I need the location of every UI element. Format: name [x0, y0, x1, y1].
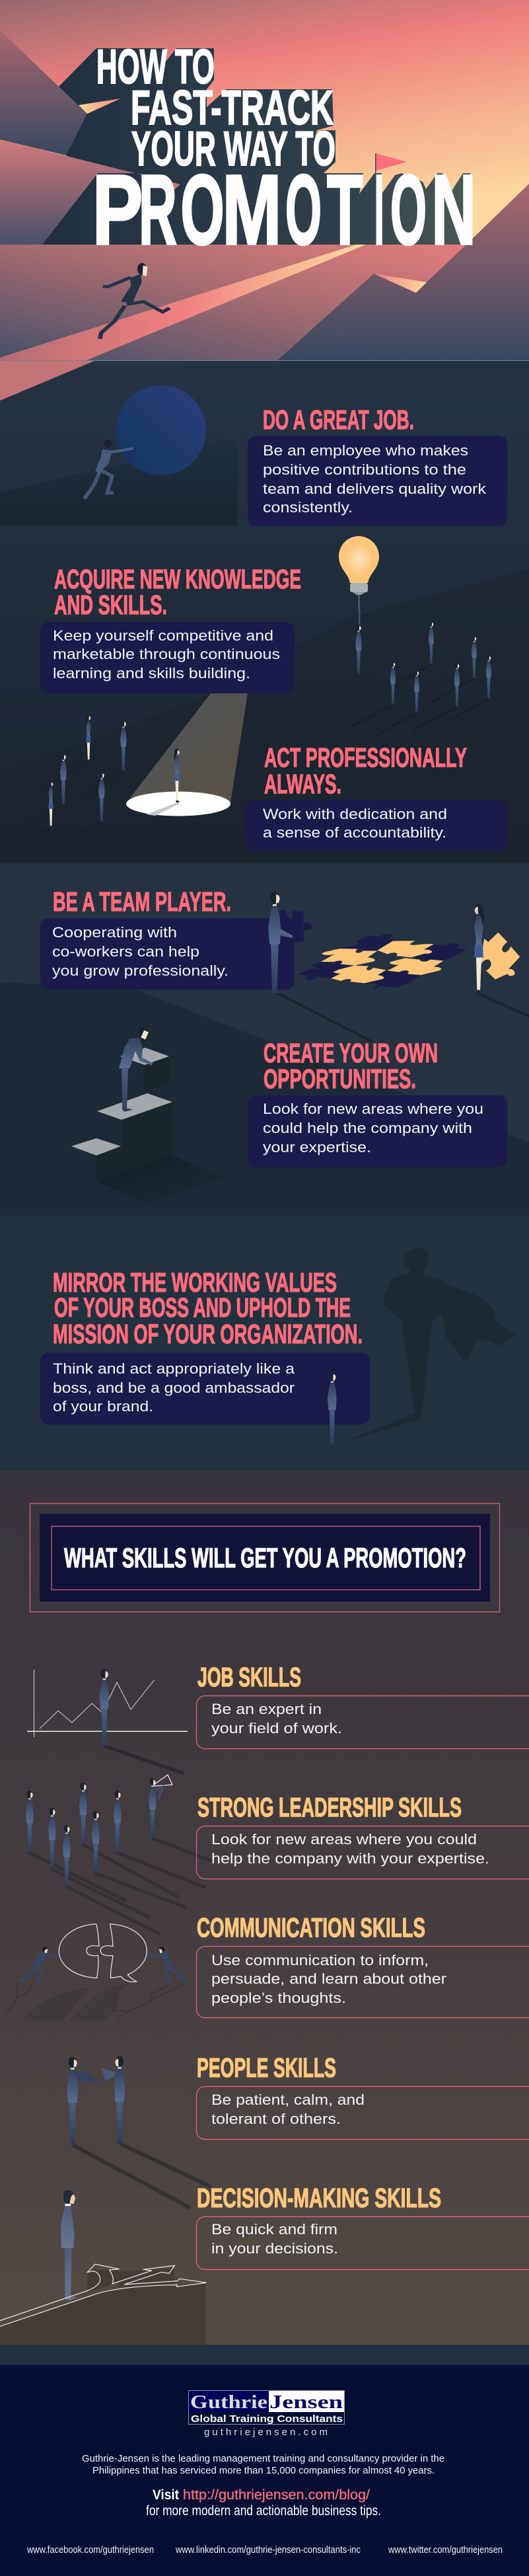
text box	[197, 2217, 529, 2270]
heading	[54, 564, 301, 620]
title: P	[92, 154, 143, 265]
title: T	[327, 154, 363, 265]
heading: COMMUNICATION SKILLS	[197, 1912, 425, 1943]
text box: you grow professionally.	[52, 962, 229, 979]
man climbing	[119, 1027, 153, 1112]
text box: in your decisions.	[211, 2240, 338, 2257]
right mountain wedge	[374, 274, 427, 293]
title: O	[390, 154, 427, 265]
panel: footer	[0, 2345, 529, 2576]
illustration: team puzzle	[268, 892, 529, 1041]
logo: Guthrie	[190, 2392, 267, 2413]
text box: persuade, and learn about other	[211, 1971, 446, 1987]
logo: guthriejensen.com	[204, 2427, 328, 2438]
illustration: two men talking	[67, 2056, 209, 2207]
title: M	[222, 154, 281, 265]
mountain sliver	[138, 173, 180, 193]
mountain: lower left	[0, 139, 180, 245]
text box: Look for new areas where you could	[211, 1831, 477, 1848]
heading	[264, 742, 467, 799]
company description	[82, 2453, 444, 2476]
person pushing left	[20, 1946, 59, 1982]
company description: Philippines that has serviced more than 15,000 companies for almost 40 years.	[92, 2465, 435, 2476]
skill: people skills	[67, 2052, 529, 2207]
heading: CREATE YOUR OWN	[264, 1038, 438, 1068]
illustration: man at forked arrows	[0, 2190, 207, 2345]
title: R	[139, 154, 177, 265]
heading	[53, 1267, 363, 1349]
title: YOUR WAY TO	[131, 122, 335, 176]
heading: DO A GREAT JOB.	[263, 405, 414, 435]
skill: decision-making skills	[0, 2183, 529, 2345]
text box: a sense of accountability.	[263, 824, 446, 841]
title: O	[180, 154, 225, 265]
puzzle floor pieces	[298, 934, 467, 989]
company description: Guthrie-Jensen is the leading management training and consultancy provider in the	[82, 2453, 444, 2464]
logo: Jensen	[269, 2392, 343, 2413]
title: FAST-TRACK	[131, 81, 334, 135]
text box: your expertise.	[263, 1139, 371, 1155]
text box: Cooperating with	[52, 924, 177, 941]
illustration: boss shadow	[337, 1247, 516, 1444]
text box: Be an expert in	[211, 1701, 322, 1717]
heading: PEOPLE SKILLS	[197, 2052, 336, 2083]
bubble left half	[59, 1924, 99, 1978]
ground with road	[0, 245, 529, 397]
heading: OF YOUR BOSS AND UPHOLD THE	[54, 1292, 351, 1323]
panel: skills background	[0, 1470, 529, 2345]
person shadows	[5, 1983, 185, 2019]
title: O	[285, 154, 322, 265]
mountain: right	[277, 184, 529, 360]
text box: Think and act appropriately like a	[53, 1360, 295, 1377]
logo: Global Training Consultants	[191, 2413, 343, 2425]
heading: ACQUIRE NEW KNOWLEDGE	[54, 564, 301, 594]
tip: acquire new knowledge	[40, 564, 301, 693]
tip: act professionally	[246, 742, 507, 851]
text box: Look for new areas where you	[263, 1101, 483, 1117]
text box: co-workers can help	[52, 943, 199, 960]
skills banner	[30, 1503, 499, 1612]
tip: do a great job	[248, 405, 507, 526]
text box: marketable through continuous	[53, 646, 280, 662]
tip: be a team player	[40, 886, 295, 990]
text box: positive contributions to the	[263, 461, 466, 478]
title long shadow	[59, 48, 335, 173]
title: N	[432, 154, 476, 265]
text box: tolerant of others.	[211, 2111, 341, 2127]
skill: job skills	[27, 1662, 529, 1773]
step tops	[71, 1048, 172, 1155]
promotion long shadow	[42, 173, 472, 245]
bubble shadow	[22, 1984, 132, 2021]
text box: consistently.	[263, 499, 353, 516]
text box	[248, 1095, 507, 1167]
text box: Work with dedication and	[263, 806, 447, 822]
text box	[197, 1696, 529, 1749]
text box: help the company with your expertise.	[211, 1850, 489, 1867]
person hanging from bulb	[355, 610, 362, 674]
panel: career tips dark background	[0, 360, 529, 1470]
text box	[248, 436, 507, 526]
illustration: stacked steps	[71, 1027, 227, 1203]
heading: MISSION OF YOUR ORGANIZATION.	[53, 1319, 363, 1349]
man over box	[328, 1372, 337, 1445]
title	[92, 40, 476, 265]
illustration: chart with man	[27, 1669, 188, 1773]
heading: AND SKILLS.	[54, 590, 167, 620]
text box	[40, 622, 295, 693]
call to action	[146, 2487, 381, 2518]
flag on pole	[375, 153, 407, 245]
text box: Be patient, calm, and	[211, 2091, 365, 2108]
spotlight beam	[130, 693, 248, 802]
text box: of your brand.	[53, 1398, 153, 1415]
text box	[197, 2086, 529, 2139]
illustration: man pushing ball	[0, 385, 238, 526]
call to action: for more modern and actionable business tips.	[146, 2503, 381, 2518]
woman in spotlight	[174, 748, 180, 802]
text box	[197, 1826, 529, 1879]
floor shadow	[97, 1155, 227, 1203]
text box: Be an employee who makes	[263, 442, 468, 459]
heading: OPPORTUNITIES.	[264, 1064, 416, 1094]
text box	[40, 1352, 370, 1425]
text box: boss, and be a good ambassador	[53, 1380, 295, 1396]
social links	[26, 2545, 503, 2556]
running man	[100, 263, 170, 339]
logo	[189, 2390, 345, 2438]
illustration: speech bubbles and people pushing	[5, 1924, 187, 2021]
man	[61, 2190, 77, 2300]
text box: Be quick and firm	[211, 2221, 337, 2238]
text box	[246, 800, 507, 851]
call to action: Visit	[153, 2487, 179, 2503]
text box	[40, 918, 295, 990]
title: HOW TO	[96, 40, 215, 94]
heading: MIRROR THE WORKING VALUES	[53, 1267, 337, 1298]
title: I	[374, 154, 384, 265]
man holding puzzle piece	[268, 892, 312, 993]
cliff	[0, 2283, 205, 2345]
block faces	[96, 1056, 172, 1182]
arrows	[0, 2264, 207, 2326]
spotlight circle	[126, 792, 230, 816]
text box: Use communication to inform,	[211, 1952, 429, 1969]
mountain: upper left	[0, 30, 87, 155]
illustration: light bulb balloon and crowd	[339, 536, 491, 737]
text box: could help the company with	[263, 1120, 472, 1136]
tip: create your own opportunities	[248, 1038, 507, 1167]
bubble right half	[100, 1924, 147, 1982]
skill: strong leadership skills	[26, 1775, 529, 1933]
back blocks	[87, 2269, 174, 2292]
text box: team and delivers quality work	[263, 481, 487, 497]
text box: your field of work.	[211, 1720, 342, 1737]
heading: BE A TEAM PLAYER.	[53, 886, 231, 917]
text box: people’s thoughts.	[211, 1990, 346, 2006]
illustration: spotlight on employee	[13, 693, 248, 849]
mountain gap wedge	[79, 98, 121, 114]
social links: www.linkedin.com/guthrie-jensen-consultants-inc	[175, 2545, 361, 2556]
person pushing right	[147, 1946, 187, 1982]
social links: www.facebook.com/guthriejensen	[26, 2545, 154, 2556]
heading: JOB SKILLS	[197, 1662, 301, 1692]
panel: hero	[0, 0, 529, 397]
text box: learning and skills building.	[53, 665, 250, 682]
heading	[264, 1038, 438, 1094]
call to action: http://guthriejensen.com/blog/	[183, 2487, 370, 2503]
social links: www.twitter.com/guthriejensen	[388, 2545, 503, 2556]
text box	[197, 1946, 529, 2017]
icon: light bulb	[339, 536, 379, 615]
illustration: leader with megaphone	[26, 1775, 211, 1933]
heading: ALWAYS.	[264, 769, 341, 799]
text box: Keep yourself competitive and	[53, 627, 273, 644]
crowd	[390, 621, 491, 713]
tip: mirror working values	[40, 1267, 370, 1445]
woman holding puzzle piece	[474, 904, 520, 994]
skill: communication skills	[5, 1912, 529, 2021]
onlookers	[48, 715, 127, 828]
